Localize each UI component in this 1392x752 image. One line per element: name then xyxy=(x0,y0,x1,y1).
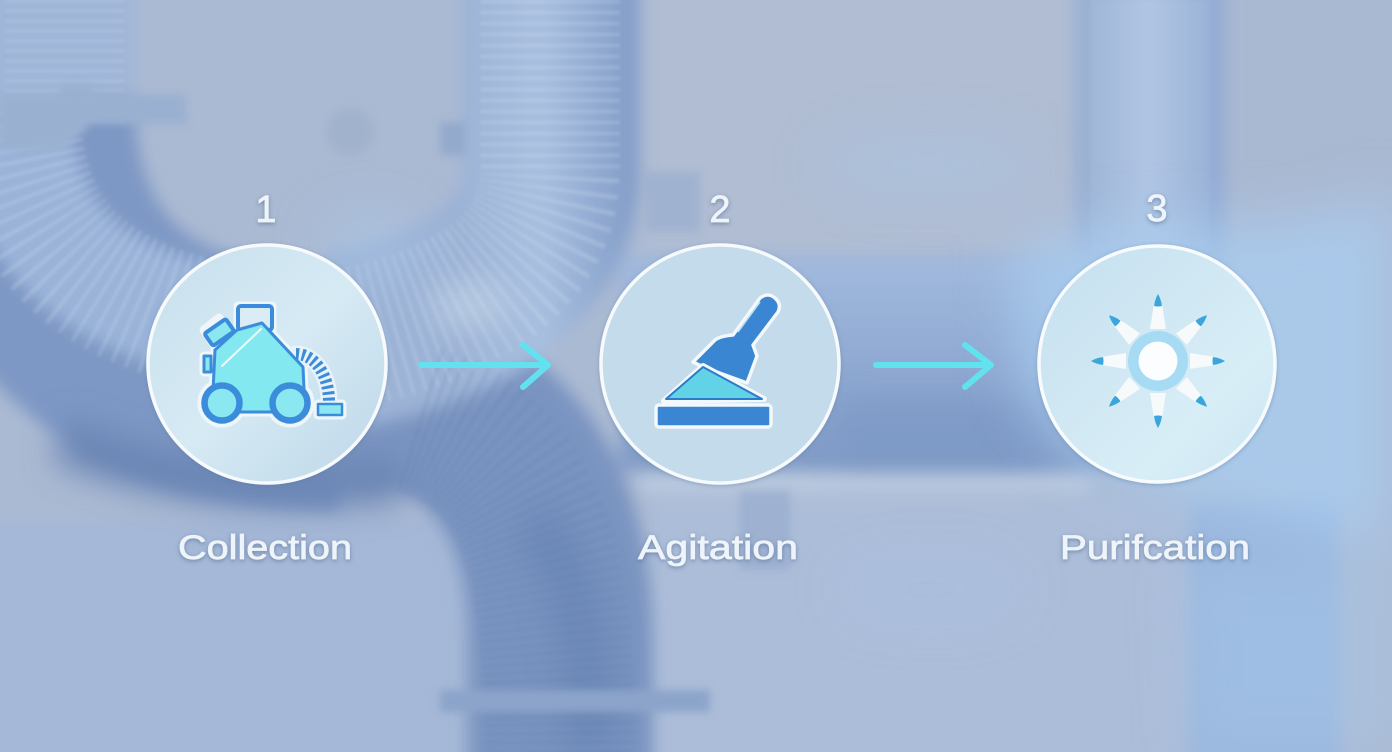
icon: agitation brush xyxy=(656,295,779,427)
circle panel 1 xyxy=(148,245,386,483)
step number 1: 1 xyxy=(255,189,277,231)
arrow: step 1 to step 2 xyxy=(421,345,548,387)
mist xyxy=(325,139,1392,752)
ribs xyxy=(15,0,1210,340)
step 1: Collection xyxy=(148,189,386,567)
pipe shading xyxy=(60,281,1060,752)
label: Collection: Collection xyxy=(178,529,352,567)
icon: purification sun burst xyxy=(1091,294,1225,428)
circle panel 3 xyxy=(1039,246,1275,482)
label: Agitation: Agitation xyxy=(638,529,798,567)
icon: collection robot with hose xyxy=(202,306,342,423)
label: Purifcation: Purifcation xyxy=(1060,529,1250,567)
step 3: Purification xyxy=(1039,188,1275,567)
circle panel 2 xyxy=(601,245,839,483)
arrow: step 2 to step 3 xyxy=(876,345,991,387)
clamps xyxy=(0,85,790,712)
step number 3: 3 xyxy=(1146,188,1168,230)
step 2: Agitation xyxy=(601,189,839,567)
step number 2: 2 xyxy=(709,189,731,231)
